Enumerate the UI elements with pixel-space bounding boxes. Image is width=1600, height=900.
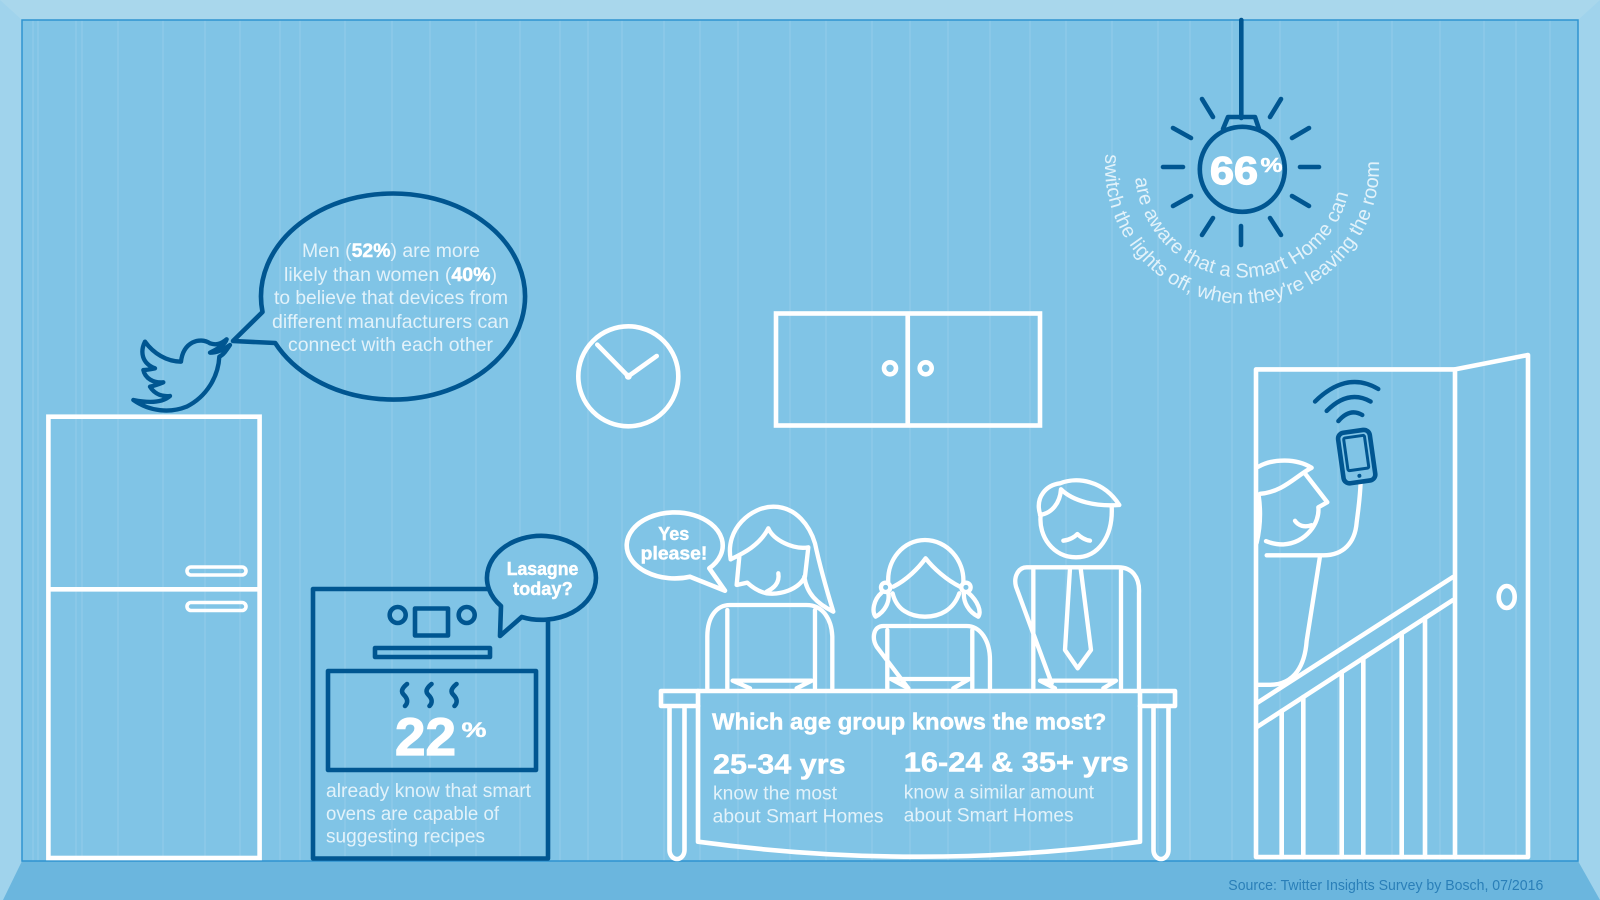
speech bubble: men vs women: Men (52%) are more (302, 241, 480, 262)
speech bubble: yes please: please! (641, 543, 707, 563)
oven (313, 589, 548, 858)
speech bubble: lasagne today: Lasagne (507, 559, 578, 579)
icon: hanging light bulb with 66%: % (1260, 155, 1283, 177)
figure: girl (874, 540, 990, 688)
table with age group panel (661, 691, 1175, 859)
stat: 25-34 (713, 748, 884, 827)
speech bubble: yes please (627, 512, 725, 591)
speech bubble: lasagne today: today? (513, 579, 573, 599)
icon: twitter bird (133, 339, 230, 411)
stat: 16-24 and 35+: about Smart Homes (904, 806, 1074, 827)
curved text: light switch awareness: are aware that a Smart Home can (1135, 178, 1348, 278)
speech bubble: yes please: Yes (658, 524, 689, 544)
figure: man on stairs (1257, 461, 1361, 685)
staircase banister (1257, 577, 1453, 857)
figure: woman (707, 507, 833, 688)
doorway and open door (1256, 355, 1528, 857)
oven: suggesting recipes (326, 826, 485, 848)
heading: which age group: Which age group knows the most? (712, 708, 1106, 734)
speech bubble: men vs women (233, 194, 525, 400)
speech bubble: men vs women: to believe that devices from (274, 288, 508, 309)
icon: smartphone (1337, 429, 1376, 484)
stat: 25-34: about Smart Homes (713, 806, 884, 827)
fridge (48, 417, 260, 858)
stat: 16-24 and 35+ (904, 747, 1129, 827)
oven: already know that smart (326, 781, 532, 802)
figure: man with tie (1015, 480, 1139, 688)
speech bubble: men vs women: connect with each other (288, 335, 494, 356)
icon: wall clock (578, 326, 678, 426)
speech bubble: lasagne today (487, 536, 596, 636)
oven: ovens are capable of (326, 804, 500, 825)
speech bubble: men vs women: different manufacturers can (272, 312, 509, 333)
stat: 16-24 and 35+: know a similar amount (904, 782, 1095, 803)
wall cabinet (776, 314, 1040, 426)
speech bubble: men vs women: likely than women (40%) (284, 265, 497, 286)
icon: hanging light bulb with 66%: 66 (1210, 150, 1258, 193)
stat: 25-34: 25-34 yrs (713, 748, 846, 779)
curved text: light switch awareness: switch the lights off, when they're leaving the room (1105, 154, 1380, 304)
stat: 16-24 and 35+: 16-24 & 35+ yrs (904, 747, 1129, 778)
icon: hanging light bulb with 66% (1163, 20, 1319, 245)
stat: 25-34: know the most (713, 783, 838, 804)
icon: wifi signal (1315, 382, 1378, 421)
oven: 22 (395, 708, 456, 767)
source note: Source: Twitter Insights Survey by Bosch, 07/2016 (1228, 877, 1543, 894)
oven: % (462, 719, 487, 742)
